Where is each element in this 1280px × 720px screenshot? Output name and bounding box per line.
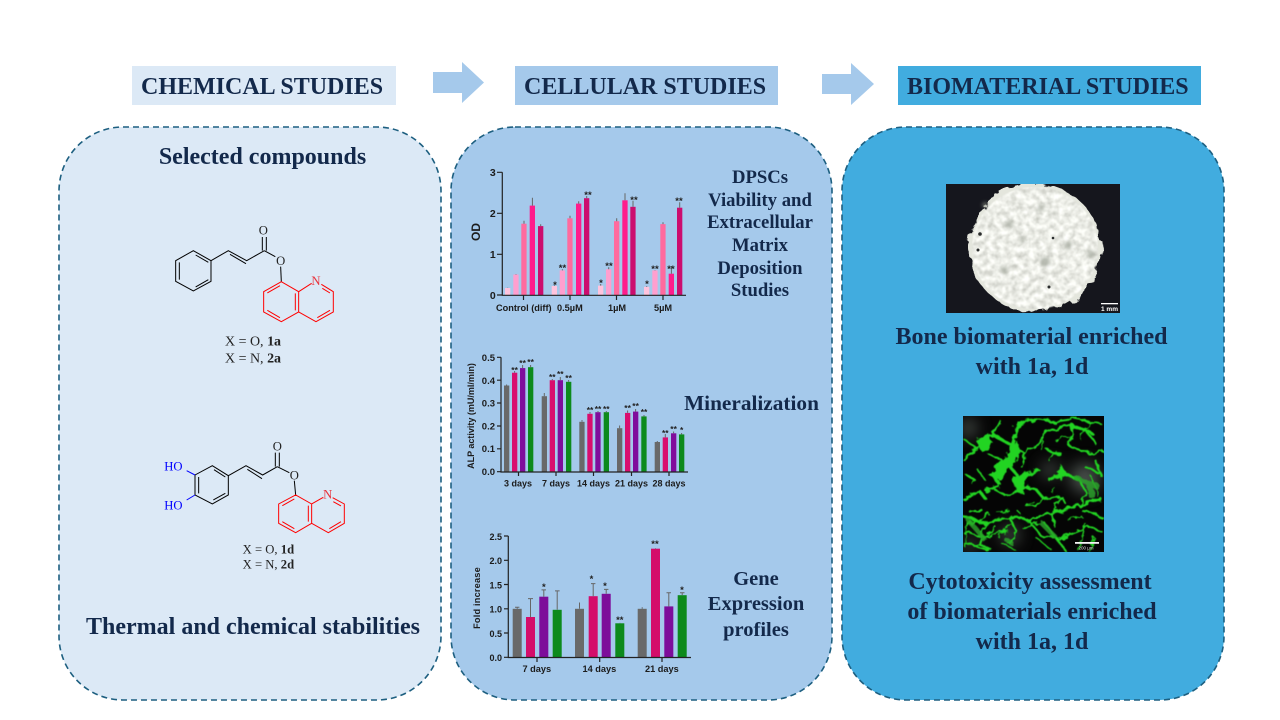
molecule: compounds 1a and 2a — [176, 223, 333, 367]
chart: gene expression fold increase bar chart: ** — [651, 539, 659, 550]
scale bar: 200 um: 200 µm — [1078, 546, 1094, 550]
molecule: compounds 1d and 2d — [164, 440, 344, 572]
label: 1a and 2a: X = O, 1a — [225, 335, 281, 350]
chart: ALP activity bar chart: ** — [511, 365, 519, 375]
chart: OD viability bar chart: ** — [584, 190, 592, 201]
chart: OD viability bar chart: 1 — [490, 249, 496, 261]
label: 1d and 2d: X = N, 2d — [243, 558, 294, 572]
chart: OD viability bar chart: Control (diff) — [496, 303, 552, 313]
chart: ALP activity bar chart: 0.0 — [482, 467, 495, 478]
text: cytotoxicity caption — [907, 569, 1157, 655]
chart: OD viability bar chart: ** — [651, 264, 659, 275]
panel: cellular studies — [451, 127, 832, 700]
chart: OD viability bar chart: 3 — [490, 167, 496, 179]
heading: biomaterial studies: BIOMATERIAL STUDIES — [907, 74, 1189, 100]
chart: OD viability bar chart: * — [553, 280, 557, 291]
chart: ALP activity bar chart: ** — [632, 401, 640, 411]
heading: chemical studies — [132, 66, 396, 105]
molecule: compounds 1d and 2d: HO — [164, 460, 182, 474]
chart: gene expression fold increase bar chart: * — [603, 581, 607, 592]
chart: OD viability bar chart: ** — [675, 196, 683, 207]
chart: ALP activity bar chart: ** — [557, 369, 564, 379]
text: mineralization: Mineralization — [684, 391, 819, 415]
text: gene expression profiles: Expression — [708, 593, 805, 615]
scale bar: 200 um — [1075, 542, 1099, 550]
chart: OD viability bar chart — [469, 167, 686, 313]
chart: ALP activity bar chart: ALP activity (mU/ml/min) — [466, 363, 476, 469]
label: 1a and 2a — [225, 335, 281, 367]
chart: ALP activity bar chart: 0.1 — [482, 444, 496, 455]
text: DPSCs viability and extracellular matrix deposition studies — [707, 167, 813, 301]
chart: gene expression fold increase bar chart — [472, 532, 691, 674]
chart: ALP activity bar chart: ** — [549, 372, 556, 382]
chart: OD viability bar chart: ** — [667, 264, 675, 275]
label: 1a and 2a: X = N, 2a — [225, 352, 281, 367]
chart: OD viability bar chart: ** — [630, 195, 638, 206]
text: thermal and chemical stabilities: Thermal and chemical stabilities — [86, 614, 420, 640]
chart: ALP activity bar chart: ** — [587, 405, 594, 415]
chart: OD viability bar chart: 5µM — [654, 303, 672, 313]
text: cytotoxicity caption: Cytotoxicity assessment — [908, 569, 1152, 595]
text: gene expression profiles — [708, 568, 805, 641]
chart: OD viability bar chart: 0 — [490, 290, 496, 302]
label: 1d and 2d — [243, 543, 294, 572]
chart: ALP activity bar chart — [466, 353, 688, 488]
chart: ALP activity bar chart: ** — [595, 404, 602, 414]
chart: ALP activity bar chart: 14 days — [577, 478, 610, 488]
chart: gene expression fold increase bar chart: 7 days — [522, 664, 551, 674]
chart: OD viability bar chart: 2 — [490, 208, 496, 220]
chart: ALP activity bar chart: ** — [641, 407, 648, 417]
chart: ALP activity bar chart: ** — [624, 403, 632, 413]
heading: cellular studies: CELLULAR STUDIES — [524, 74, 766, 100]
chart: ALP activity bar chart: 0.2 — [482, 422, 495, 432]
text: gene expression profiles: profiles — [723, 619, 789, 641]
chart: ALP activity bar chart: 0.4 — [482, 376, 496, 387]
text: cytotoxicity caption: of biomaterials enriched — [907, 599, 1157, 625]
text: DPSCs viability and extracellular matrix deposition studies: Deposition — [717, 258, 803, 279]
arrow: chemical to cellular — [433, 62, 484, 103]
chart: gene expression fold increase bar chart: ** — [616, 615, 624, 626]
text: DPSCs viability and extracellular matrix deposition studies: Matrix — [732, 235, 789, 256]
panel: chemical studies — [59, 127, 441, 700]
chart: gene expression fold increase bar chart: 21 days — [645, 664, 679, 674]
photo: fluorescence microscopy of biomaterial — [959, 416, 1104, 552]
chart: ALP activity bar chart: * — [680, 425, 684, 435]
chart: OD viability bar chart: * — [599, 278, 603, 289]
panel heading: selected compounds: Selected compounds — [159, 144, 366, 170]
molecule: compounds 1d and 2d: HO — [164, 498, 182, 512]
chart: OD viability bar chart: 1µM — [608, 303, 626, 313]
chart: gene expression fold increase bar chart: * — [680, 585, 684, 596]
heading: biomaterial studies — [898, 66, 1201, 105]
molecule: compounds 1a and 2a: O — [259, 223, 268, 237]
chart: OD viability bar chart: ** — [559, 263, 566, 274]
chart: gene expression fold increase bar chart: 2.0 — [489, 556, 502, 566]
chart: gene expression fold increase bar chart: 1.5 — [489, 580, 502, 590]
chart: gene expression fold increase bar chart: 2.5 — [489, 532, 502, 542]
text: DPSCs viability and extracellular matrix deposition studies: Extracellular — [707, 212, 813, 233]
chart: OD viability bar chart: * — [645, 279, 649, 290]
chart: ALP activity bar chart: ** — [670, 424, 678, 434]
photo: bone biomaterial scaffold — [946, 184, 1120, 313]
chart: ALP activity bar chart: ** — [527, 357, 535, 367]
chart: ALP activity bar chart: ** — [565, 373, 573, 383]
chart: ALP activity bar chart: ** — [519, 358, 527, 368]
chart: gene expression fold increase bar chart: * — [590, 574, 594, 585]
chart: ALP activity bar chart: ** — [662, 428, 669, 438]
chart: gene expression fold increase bar chart: 0.5 — [489, 629, 502, 639]
chart: OD viability bar chart: OD — [469, 223, 483, 241]
text: DPSCs viability and extracellular matrix deposition studies: DPSCs — [732, 167, 788, 188]
chart: ALP activity bar chart: 21 days — [615, 478, 648, 488]
arrow: cellular to biomaterial — [822, 63, 874, 105]
chart: gene expression fold increase bar chart: 1.0 — [489, 604, 502, 614]
text: cytotoxicity caption: with 1a, 1d — [976, 629, 1089, 655]
chart: ALP activity bar chart: 7 days — [542, 478, 570, 488]
text: bone biomaterial caption — [896, 324, 1168, 380]
chart: gene expression fold increase bar chart: * — [542, 582, 546, 593]
chart: ALP activity bar chart: 3 days — [504, 478, 532, 488]
chart: ALP activity bar chart: ** — [603, 404, 610, 414]
chart: ALP activity bar chart: 28 days — [652, 478, 686, 488]
scale bar: 1 mm — [1101, 303, 1118, 311]
text: bone biomaterial caption: with 1a, 1d — [976, 354, 1089, 380]
heading: cellular studies — [515, 66, 778, 105]
chart: gene expression fold increase bar chart: 0.0 — [489, 653, 502, 663]
molecule: compounds 1d and 2d: N — [323, 487, 332, 501]
molecule: compounds 1a and 2a: O — [276, 254, 285, 268]
text: gene expression profiles: Gene — [733, 568, 779, 590]
scale bar: 1 mm: 1 mm — [1101, 306, 1118, 313]
chart: gene expression fold increase bar chart: 14 days — [582, 664, 616, 674]
molecule: compounds 1a and 2a: N — [311, 274, 321, 288]
molecule: compounds 1d and 2d: O — [290, 468, 299, 482]
text: bone biomaterial caption: Bone biomaterial enriched — [896, 324, 1168, 350]
chart: gene expression fold increase bar chart: Fold increase — [472, 567, 482, 629]
chart: OD viability bar chart: ** — [605, 261, 613, 272]
molecule: compounds 1d and 2d: O — [273, 440, 282, 454]
chart: ALP activity bar chart: 0.3 — [482, 398, 495, 410]
text: DPSCs viability and extracellular matrix deposition studies: Studies — [731, 280, 789, 301]
chart: OD viability bar chart: 0.5µM — [557, 303, 583, 313]
chart: ALP activity bar chart: 0.5 — [482, 353, 496, 364]
panel: biomaterial studies — [842, 127, 1224, 700]
heading: chemical studies: CHEMICAL STUDIES — [141, 74, 383, 100]
text: DPSCs viability and extracellular matrix deposition studies: Viability and — [708, 190, 812, 211]
label: 1d and 2d: X = O, 1d — [243, 543, 294, 557]
